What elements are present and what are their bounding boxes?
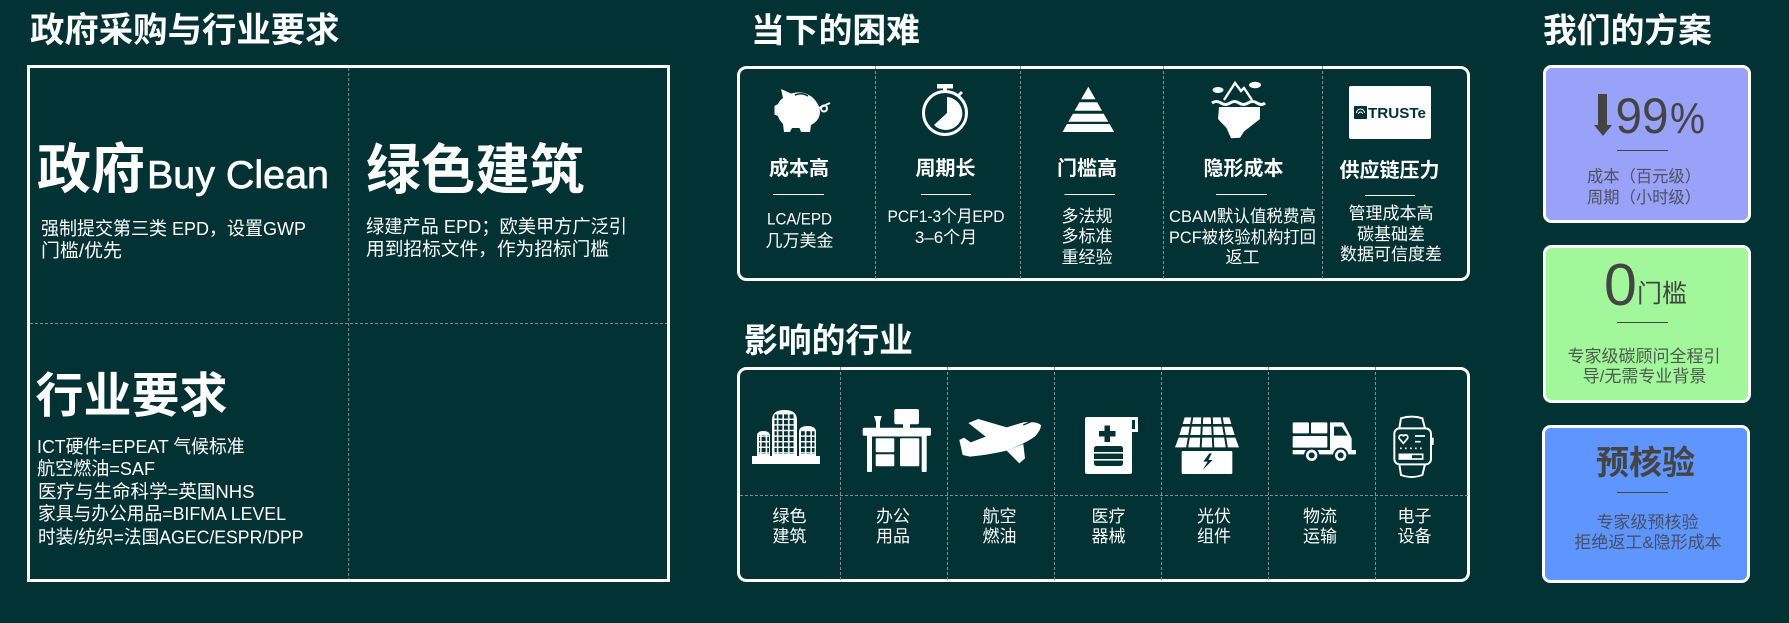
item: high threshold: 重经验 [1062,248,1112,267]
item: logistics: 物流 [1303,507,1337,526]
text block: government Buy Clean: Buy Clean [147,154,329,197]
item: medical devices: 器械 [1092,527,1126,546]
icon: medical document [1085,417,1138,474]
item: logistics [1293,422,1356,546]
text block: industry requirements: 航空燃油=SAF [37,458,155,479]
item: photovoltaic modules: 光伏 [1197,507,1231,526]
card: zero threshold: 0 [1604,252,1637,318]
item: high threshold: 多标准 [1062,227,1112,246]
item: photovoltaic modules: 组件 [1197,527,1231,546]
text block: industry requirements [36,370,304,548]
card: pre-verification: 专家级预核验 [1596,513,1698,532]
item: green building [752,410,820,546]
card: 99 percent reduction: % [1670,94,1705,143]
item: hidden cost: PCF被核验机构打回 [1169,228,1316,247]
item: office supplies: 用品 [876,527,910,546]
item: supply chain pressure [1340,86,1442,264]
icon: solar panel [1175,415,1239,474]
card: 99 percent reduction: 周期（小时级） [1587,189,1701,207]
text block: industry requirements: ICT硬件=EPEAT 气候标准 [37,436,245,457]
text block: green building: 绿建产品 EPD；欧美甲方广泛引 [366,216,627,237]
item: hidden cost: 隐形成本 [1204,156,1284,180]
icon: desk [863,409,931,472]
item: high cost [766,89,834,250]
text block: green building: 用到招标文件，作为招标门槛 [366,238,609,260]
heading: affected industries: 影响的行业 [744,322,913,360]
item: logistics: 运输 [1303,527,1337,546]
text block: industry requirements: 行业要求 [36,370,228,423]
card: zero threshold: 导/无需专业背景 [1583,367,1706,386]
panel: affected industries [738,367,1468,580]
card: zero threshold: 门槛 [1637,280,1687,308]
text block: government Buy Clean [37,140,329,261]
item: office supplies: 办公 [876,507,910,526]
text block: industry requirements: 家具与办公用品=BIFMA LEVEL [38,503,286,524]
item: electronic devices [1394,417,1434,546]
icon: TRUSTe badge: TRUSTe [1368,105,1426,122]
item: high cost: 几万美金 [766,232,834,250]
text block: green building: 绿色建筑 [366,140,584,201]
card: pre-verification: 拒绝返工&隐形成本 [1574,533,1722,552]
item: hidden cost: 返工 [1226,248,1260,267]
item: aviation fuel: 燃油 [982,527,1016,546]
item: long cycle: 周期长 [916,157,976,180]
item: green building: 建筑 [772,527,806,546]
item: aviation fuel [959,419,1041,546]
heading: our solution: 我们的方案 [1543,12,1712,50]
item: office supplies [863,409,931,546]
heading: current difficulties: 当下的困难 [751,12,920,50]
item: hidden cost [1169,82,1316,267]
item: high cost: LCA/EPD [767,210,832,228]
card: 99 percent reduction: 99 [1616,88,1668,144]
item: supply chain pressure: 碳基础差 [1357,225,1425,244]
text block: green building [366,140,627,260]
item: high cost: 成本高 [769,156,829,180]
icon: iceberg [1212,82,1265,138]
item: medical devices: 医疗 [1092,507,1126,526]
text block: industry requirements: 时装/纺织=法国AGEC/ESPR/DPP [38,526,304,548]
panel: current difficulties [738,66,1468,281]
icon: stopwatch [924,84,966,134]
card: 99 percent reduction: 成本（百元级） [1587,168,1701,186]
item: medical devices [1085,417,1138,546]
icon: piggy bank [774,89,830,132]
text block: government Buy Clean: 强制提交第三类 EPD，设置GWP [41,218,306,239]
item: high threshold: 多法规 [1062,207,1112,226]
card: zero threshold [1544,246,1750,402]
item: electronic devices: 设备 [1398,527,1432,546]
icon: down arrow [1594,94,1612,136]
item: supply chain pressure: 管理成本高 [1348,204,1434,223]
heading: government procurement and industry requirements: 政府采购与行业要求 [30,12,340,50]
text block: government Buy Clean: 门槛/优先 [41,240,122,261]
item: electronic devices: 电子 [1398,507,1432,526]
item: long cycle: PCF1-3个月EPD [888,207,1004,226]
item: long cycle [888,84,1004,247]
card: pre-verification [1544,426,1748,582]
icon: TRUSTe badge [1349,86,1431,139]
card: pre-verification: 预核验 [1596,444,1695,481]
icon: pyramid [1062,87,1114,132]
item: supply chain pressure: 数据可信度差 [1340,245,1442,264]
icon: truck [1293,422,1356,463]
item: photovoltaic modules [1175,415,1239,546]
text block: industry requirements: 医疗与生命科学=英国NHS [38,481,254,502]
item: hidden cost: CBAM默认值税费高 [1169,207,1316,226]
icon: buildings [752,410,820,464]
item: high threshold [1057,87,1117,267]
panel: government procurement and industry requirements [28,66,668,580]
item: supply chain pressure: 供应链压力 [1340,158,1440,182]
icon: airplane [959,419,1041,463]
item: long cycle: 3–6个月 [915,228,977,247]
text block: government Buy Clean: 政府 [37,140,145,200]
item: green building: 绿色 [772,507,806,526]
icon: smart watch [1394,417,1434,477]
item: high threshold: 门槛高 [1057,156,1117,180]
item: aviation fuel: 航空 [982,507,1016,526]
card: zero threshold: 专家级碳顾问全程引 [1568,347,1720,366]
card: 99 percent reduction [1544,66,1750,222]
